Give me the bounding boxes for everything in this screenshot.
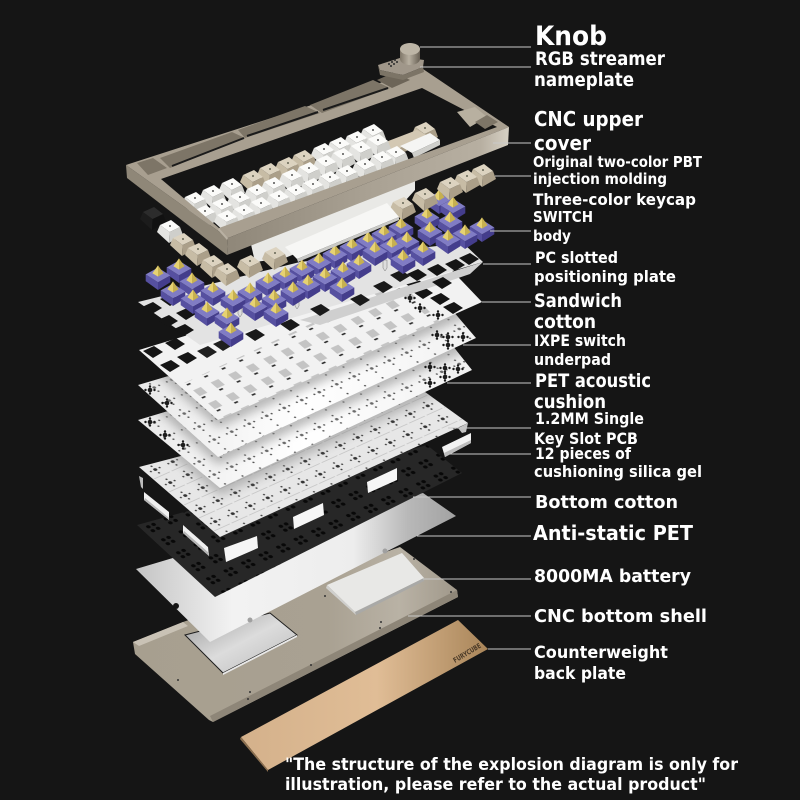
8000MA battery	[326, 553, 424, 615]
brand mark on plate: FURYCUBE	[452, 642, 483, 665]
label: CNC bottom shell: CNC bottom shell	[534, 606, 707, 627]
label: CNC upper cover: cover	[534, 131, 591, 155]
label: PET acoustic cushion: PET acoustic	[535, 370, 651, 392]
label: PET acoustic cushion	[447, 370, 651, 413]
label: SWITCH body: SWITCH	[533, 208, 593, 226]
label: Three-color keycap: Three-color keycap	[533, 190, 696, 209]
label: Sandwich cotton: Sandwich	[534, 290, 622, 312]
1.2MM PCB	[139, 392, 468, 537]
label: 8000MA battery: 8000MA battery	[534, 566, 691, 587]
label: RGB streamer nameplate: RGB streamer	[535, 48, 666, 70]
bottom cotton, black foam	[137, 445, 462, 597]
back key rows	[182, 122, 440, 233]
label: 1.2MM Single Key Slot PCB: Key Slot PCB	[534, 429, 638, 448]
frame recesses	[137, 72, 498, 175]
label: SWITCH body	[490, 208, 593, 245]
label: IXPE switch underpad: IXPE switch	[534, 331, 626, 350]
label: 12 pieces of cushioning silica gel: cushioning silica gel	[534, 462, 702, 481]
IXPE switch underpad	[138, 314, 476, 457]
label: RGB streamer nameplate: nameplate	[534, 69, 634, 91]
label: Bottom cotton: Bottom cotton	[535, 492, 678, 513]
label: PC slotted positioning plate	[483, 248, 676, 286]
label: Counterweight back plate	[488, 643, 668, 684]
CNC bottom shell	[133, 547, 458, 722]
label: Counterweight back plate: back plate	[534, 664, 626, 684]
CNC upper cover frame	[126, 69, 509, 255]
sandwich cotton	[139, 258, 482, 420]
label: CNC upper cover: CNC upper	[534, 107, 643, 131]
label: IXPE switch underpad	[463, 331, 626, 369]
label: SWITCH body: body	[533, 227, 571, 245]
knob and RGB nameplate	[378, 43, 424, 80]
label: Original two-color PBT injection molding	[495, 153, 703, 188]
left battery bay	[185, 613, 297, 673]
label: Original two-color PBT injection molding: Original two-color PBT	[533, 153, 703, 171]
label: 12 pieces of cushioning silica gel: 12 pieces of	[535, 444, 632, 463]
label: Sandwich cotton: cotton	[534, 311, 596, 333]
label: PC slotted positioning plate: PC slotted	[535, 248, 618, 267]
label: IXPE switch underpad: underpad	[534, 350, 611, 369]
label: PET acoustic cushion: cushion	[534, 391, 606, 413]
label: Sandwich cotton	[482, 290, 622, 333]
label: Original two-color PBT injection molding: injection molding	[533, 170, 667, 188]
exploded keyboard infographic	[126, 24, 738, 794]
anti-static PET sheet	[136, 493, 456, 642]
label: PC slotted positioning plate: positioning plate	[534, 267, 676, 286]
label: Knob: Knob	[535, 21, 607, 52]
stabilizer clips	[216, 260, 387, 325]
label: Counterweight back plate: Counterweight	[534, 643, 668, 663]
PC slotted positioning plate	[138, 243, 483, 345]
switches	[146, 189, 494, 347]
front key row	[157, 164, 496, 286]
counterweight back plate	[240, 620, 488, 772]
footer disclaimer: illustration, please refer to the actual product"	[285, 775, 706, 795]
label: 1.2MM Single Key Slot PCB: 1.2MM Single	[535, 409, 644, 428]
footer disclaimer: "The structure of the explosion diagram is only for	[285, 755, 739, 775]
label: Anti-static PET: Anti-static PET	[533, 521, 693, 545]
keycaps	[140, 122, 496, 286]
escape key	[140, 207, 166, 230]
silica gel cushioning pads	[144, 433, 471, 562]
label: RGB streamer nameplate	[420, 48, 666, 91]
label: 12 pieces of cushioning silica gel	[450, 444, 702, 481]
footer disclaimer	[285, 755, 739, 795]
label: CNC upper cover	[493, 107, 643, 155]
label: 1.2MM Single Key Slot PCB	[448, 409, 644, 448]
PET acoustic cushion	[138, 348, 472, 488]
